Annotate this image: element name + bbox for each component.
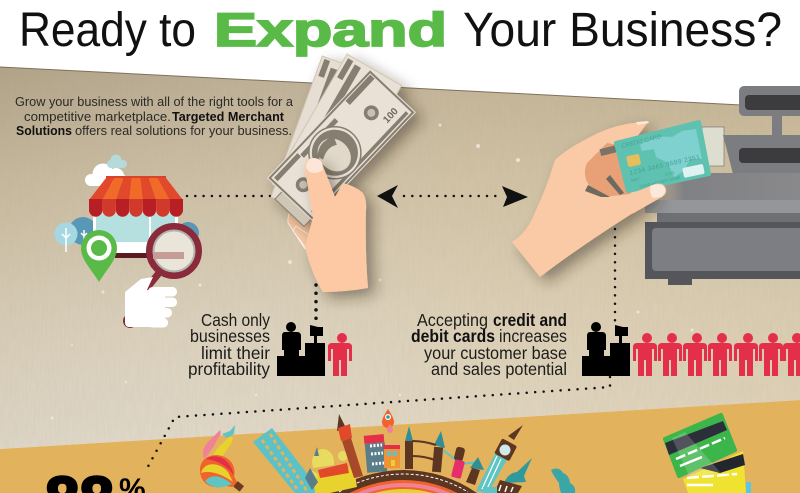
domed church — [305, 447, 357, 493]
icon: magnifying glass — [146, 226, 198, 289]
title: Ready to — [19, 4, 196, 57]
title: Your Business? — [463, 4, 782, 57]
text: accepting credit and debit cards: credit and — [493, 310, 567, 330]
intro text: competitive marketplace. — [24, 109, 171, 124]
credit card: 4567 — [630, 176, 641, 183]
fingers — [288, 207, 321, 249]
credit card: 12/16 — [664, 170, 676, 177]
text: cash only businesses: profitability — [188, 359, 270, 379]
blue house — [364, 434, 387, 473]
icon: cash register — [645, 86, 800, 285]
icon: storefront with magnifier — [54, 154, 199, 328]
yellow card — [683, 451, 751, 493]
text: cash only businesses — [188, 310, 270, 379]
icon: hand holding cash — [267, 54, 416, 292]
icon: teal plant — [551, 469, 575, 493]
thumbnail — [306, 158, 323, 173]
intro text — [15, 94, 294, 138]
teal domed building — [483, 458, 532, 493]
palm and thumb — [305, 158, 368, 292]
orange house — [383, 445, 400, 468]
text: cash only businesses: limit their — [201, 343, 270, 363]
hand — [512, 122, 655, 277]
seller and counter — [277, 322, 325, 376]
tower bridge — [405, 426, 479, 472]
credit card: CARD HOLDER NAME — [639, 175, 681, 189]
text: accepting credit and debit cards: debit cards — [411, 326, 495, 346]
intro text: Solutions — [16, 123, 72, 138]
credit card — [616, 122, 709, 191]
bills — [267, 54, 416, 226]
front bill — [267, 69, 416, 221]
front bill: 100 — [381, 106, 401, 126]
icon: stacked bank cards — [665, 415, 751, 493]
icon: city skyline on globe — [305, 414, 532, 493]
customer — [328, 333, 352, 376]
dotted connector: counter to statistic — [145, 377, 610, 472]
text: accepting credit and debit cards: and sales potential — [431, 359, 567, 379]
clock tower — [476, 425, 523, 493]
intro text: Targeted Merchant — [172, 109, 285, 124]
statistic — [45, 470, 146, 493]
intro text: Grow your business with all of the right tools for a — [15, 94, 294, 109]
dotted connector: card hand to counter — [614, 229, 616, 322]
receipt paper — [702, 127, 724, 166]
credit card: CREDIT CARD — [621, 134, 663, 150]
middle bill — [272, 54, 402, 215]
title: Expand — [214, 3, 447, 56]
text: accepting credit and debit cards: increases — [499, 326, 567, 346]
display — [739, 86, 800, 116]
neck — [772, 116, 782, 136]
thumb — [600, 184, 666, 223]
text: cash only businesses: Cash only — [201, 310, 270, 330]
icon: cash counter with one customer — [277, 322, 352, 376]
dotted connector: store to cash — [187, 195, 272, 197]
upper body — [723, 135, 800, 174]
panel: sand band — [0, 400, 800, 493]
mid section — [645, 173, 800, 200]
icon: map pin — [81, 230, 117, 282]
small bridge tower — [466, 457, 484, 485]
icon: double-headed arrow — [377, 185, 528, 208]
seller and counter — [582, 322, 630, 376]
palm shadow — [585, 143, 631, 197]
title — [19, 3, 782, 57]
customers — [633, 333, 800, 376]
icon: clouds — [85, 154, 127, 186]
text: cash only businesses: businesses — [190, 326, 270, 346]
fingernail — [636, 121, 649, 125]
credit card: 1234 3465 3689 2351 — [629, 154, 701, 177]
globe rings — [330, 470, 477, 493]
icon: hot air balloon — [200, 425, 244, 492]
lipstick tower — [451, 446, 466, 479]
store building — [93, 205, 178, 258]
back bill — [271, 56, 382, 219]
green card — [665, 415, 735, 478]
awning — [89, 176, 183, 217]
icon: card counter with many customers — [582, 322, 800, 376]
icon: leaning tower — [253, 428, 322, 493]
drawer — [645, 222, 800, 279]
icon: ink drop marker — [382, 409, 394, 433]
foot — [668, 279, 692, 285]
dotted connector: cash hand to counter — [314, 285, 318, 322]
intro text: offers real solutions for your business. — [75, 123, 292, 138]
text: accepting credit and debit cards: your customer base — [424, 343, 567, 363]
text: accepting credit and debit cards — [411, 310, 567, 379]
lower bill — [275, 155, 345, 226]
icon: white hand — [123, 277, 177, 328]
bell tower — [337, 414, 363, 478]
text: accepting credit and debit cards: Accepting — [417, 310, 488, 330]
icon: trees — [54, 217, 199, 252]
icon: hand holding credit card — [512, 121, 709, 277]
